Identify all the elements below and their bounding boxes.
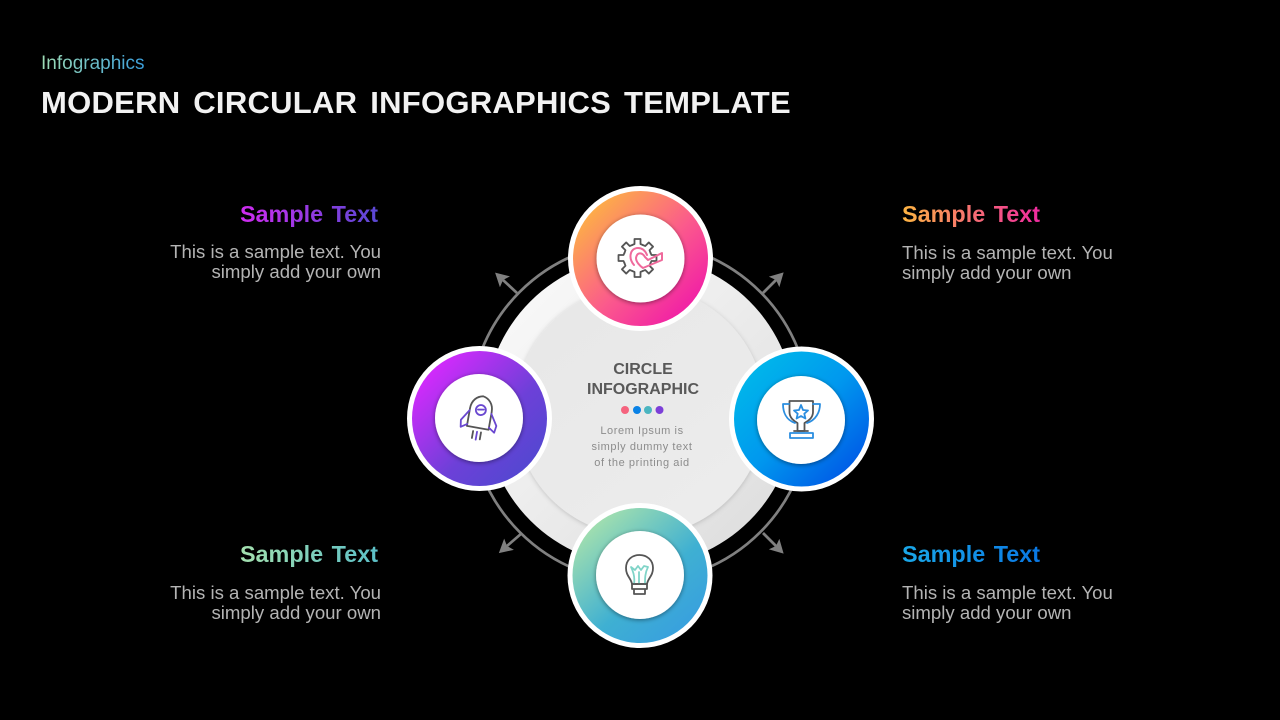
- outer ring with arrows: [470, 242, 810, 582]
- arrow: bottom right: [763, 533, 776, 546]
- center heading: INFOGRAPHIC: [587, 380, 699, 398]
- body: This is a sample text. You: [902, 242, 1113, 263]
- body: simply add your own: [902, 262, 1072, 283]
- center heading: CIRCLE: [613, 361, 673, 378]
- node: top gear: [568, 186, 713, 331]
- body: [902, 242, 1113, 283]
- icon: light bulb: [626, 555, 653, 594]
- body: This is a sample text. You: [170, 582, 381, 603]
- heading: Sample Text: [902, 201, 1040, 227]
- arrow: top right: [763, 280, 776, 293]
- body: [170, 582, 381, 623]
- arrow: bottom left: [507, 533, 522, 546]
- heading: Sample Text: [902, 541, 1040, 567]
- node: left rocket: [407, 346, 552, 491]
- center body text: simply dummy text: [592, 441, 692, 453]
- icon: rocket: [458, 393, 501, 443]
- center heading: [587, 361, 699, 398]
- body: simply add your own: [212, 261, 381, 282]
- arrow: top left: [503, 280, 517, 293]
- central disc: [485, 256, 795, 566]
- text block: bottom left: [170, 541, 381, 623]
- body: simply add your own: [212, 602, 381, 623]
- center body text: [592, 425, 692, 469]
- node: right trophy: [729, 346, 874, 492]
- body: This is a sample text. You: [902, 582, 1113, 603]
- icon: trophy: [783, 401, 820, 438]
- title: MODERN CIRCULAR INFOGRAPHICS TEMPLATE: [41, 85, 791, 120]
- text block: bottom right: [902, 541, 1113, 623]
- body: [902, 582, 1113, 623]
- colour dots: [621, 406, 664, 414]
- node: bottom bulb: [568, 503, 712, 648]
- body: This is a sample text. You: [170, 241, 381, 262]
- body: [170, 241, 381, 282]
- heading: Sample Text: [240, 541, 378, 567]
- text block: top right: [902, 201, 1113, 283]
- center body text: Lorem Ipsum is: [600, 425, 684, 437]
- heading: Sample Text: [240, 201, 378, 227]
- text block: top left: [170, 201, 381, 282]
- body: simply add your own: [902, 602, 1072, 623]
- icon: gear with check: [618, 239, 662, 277]
- center body text: of the printing aid: [594, 457, 690, 469]
- eyebrow label: Infographics: [41, 53, 145, 74]
